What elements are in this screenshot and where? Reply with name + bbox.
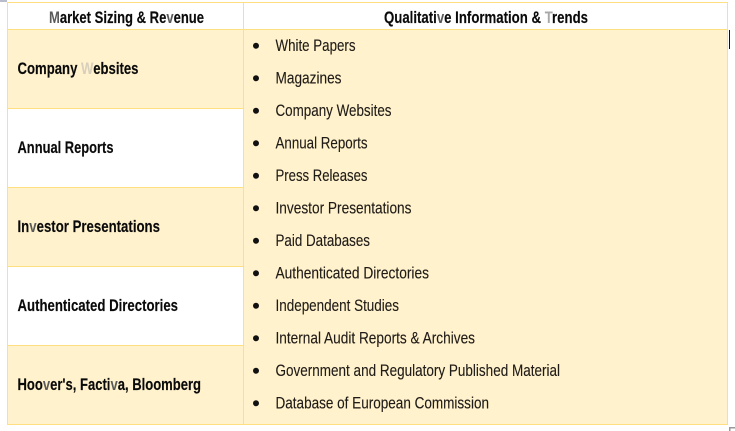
- list item: government and regulatory published material: Government and Regulatory Published Material: [276, 362, 560, 380]
- text cursor mark: [729, 30, 730, 49]
- list item: annual reports: Annual Reports: [276, 134, 368, 152]
- panel: market sizing column: [8, 30, 244, 424]
- row: authenticated directories: Authenticated Directories: [18, 297, 178, 315]
- list item: press releases: [253, 167, 368, 185]
- list item: press releases: Press Releases: [276, 167, 368, 185]
- heading: qualitative information and trends: Qualitative Information & Trends: [384, 9, 588, 27]
- heading: market sizing and revenue: Market Sizing & Revenue: [49, 9, 204, 27]
- list item: company websites: Company Websites: [276, 102, 392, 120]
- row: data vendors: Hoover's, Factiva, Bloomberg: [18, 376, 201, 394]
- list item: magazines: [253, 70, 342, 88]
- list item: database of european commission: Database of European Commission: [276, 394, 489, 412]
- row: investor presentations: Investor Presentations: [18, 218, 160, 236]
- row: annual reports: [8, 108, 244, 188]
- list item: annual reports: [253, 134, 368, 152]
- corner mark: top left: [0, 0, 7, 2]
- corner mark: bottom right: [729, 427, 735, 431]
- panel: qualitative information list: [244, 30, 728, 424]
- list item: investor presentations: Investor Presentations: [276, 200, 412, 218]
- list item: magazines: Magazines: [276, 70, 342, 88]
- row: annual reports: Annual Reports: [18, 139, 114, 157]
- row: company websites: Company Websites: [18, 60, 138, 78]
- list item: internal audit reports and archives: Internal Audit Reports & Archives: [276, 330, 475, 348]
- row: authenticated directories: [8, 266, 244, 346]
- panel: table header: [8, 2, 728, 30]
- list item: paid databases: [253, 232, 370, 250]
- row: investor presentations: [8, 188, 244, 266]
- list item: white papers: [253, 37, 356, 55]
- list item: independent studies: Independent Studies: [276, 297, 399, 315]
- list item: white papers: White Papers: [276, 37, 356, 55]
- row: company websites: [8, 30, 244, 108]
- row: data vendors: [8, 346, 244, 424]
- list item: paid databases: Paid Databases: [276, 232, 370, 250]
- list item: authenticated directories: Authenticated Directories: [276, 264, 429, 282]
